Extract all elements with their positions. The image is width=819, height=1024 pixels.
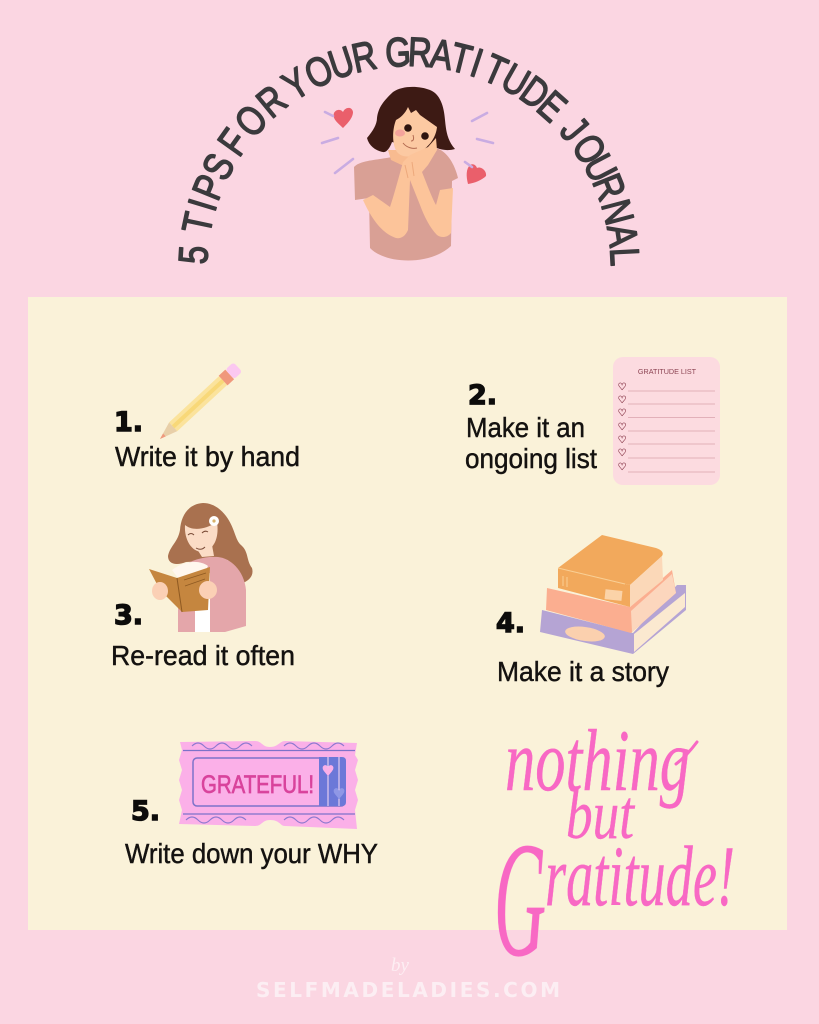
tip 3 number: 3. <box>114 600 143 631</box>
title: T <box>446 33 477 83</box>
icon: grateful ticket: ♥ <box>332 785 346 803</box>
hand lettering: nothing but gratitude: G <box>494 808 546 991</box>
shirt <box>195 573 210 632</box>
footer: website: SELFMADELADIES.COM <box>256 978 560 1002</box>
hearts <box>334 108 353 128</box>
tip 4 number: 4. <box>496 608 525 639</box>
title: A <box>427 30 456 79</box>
tip 3 <box>111 503 295 671</box>
tip 2 number: 2. <box>468 380 497 411</box>
title: P <box>183 168 234 206</box>
icon: gratitude list card <box>613 357 720 485</box>
blush <box>395 130 405 136</box>
title: R <box>407 28 433 76</box>
title: I <box>179 194 226 216</box>
sparkle dashes <box>322 112 493 173</box>
tip 2 label: Make it an <box>466 412 585 443</box>
hair <box>367 87 455 152</box>
neck <box>388 150 420 168</box>
arms and hands <box>363 138 453 238</box>
title: A <box>598 221 647 250</box>
icon: pencil <box>156 362 242 444</box>
icon: gratitude list card: ♡ <box>618 422 627 433</box>
tip 5 <box>125 741 378 869</box>
icon: gratitude list card: ♡ <box>618 408 627 419</box>
illustration: girl reading <box>149 503 253 632</box>
icon: gratitude list card: ♡ <box>618 462 627 473</box>
icon: grateful ticket: GRATEFUL! <box>201 771 314 799</box>
title: R <box>584 167 636 207</box>
title: R <box>348 31 380 82</box>
illustration: girl with hands by cheek <box>322 87 493 260</box>
face <box>393 107 437 156</box>
tip 5 number: 5. <box>131 796 160 827</box>
tip 2: ongoing list <box>465 443 597 474</box>
icon: gratitude list card: ♡ <box>618 382 627 393</box>
icon: gratitude list card: GRATITUDE LIST <box>638 367 697 376</box>
tip 1 <box>114 362 300 472</box>
title: E <box>529 81 576 131</box>
tip 2 <box>465 357 720 485</box>
tip 3 label: Re-read it often <box>111 640 295 671</box>
title: T <box>173 208 222 238</box>
title: I <box>465 39 489 86</box>
title: R <box>247 76 295 126</box>
icon: grateful ticket: ♥ <box>321 762 335 780</box>
hand lettering: nothing but gratitude: but <box>566 777 635 854</box>
icon: gratitude list card: ♡ <box>618 435 627 446</box>
hand lettering: nothing but gratitude: nothing <box>505 713 690 810</box>
hand lettering: nothing but gratitude <box>494 713 735 991</box>
title: O <box>225 95 276 146</box>
icon: gratitude list card: ♡ <box>618 448 627 459</box>
hair <box>168 503 253 583</box>
title: U <box>494 54 538 106</box>
title: G <box>384 28 412 76</box>
icon: stack of books <box>540 535 686 654</box>
book <box>172 562 208 578</box>
title: F <box>208 120 258 164</box>
icon: gratitude list card: ♡ <box>618 395 627 406</box>
title: 5 <box>169 244 217 265</box>
title: S <box>192 146 244 187</box>
title: D <box>512 67 558 118</box>
tip 5 label: Write down your WHY <box>125 838 378 869</box>
cardigan <box>178 557 246 632</box>
title: Y <box>274 58 317 109</box>
title: N <box>593 195 643 229</box>
icon: grateful ticket <box>179 741 358 829</box>
title: J <box>551 107 598 150</box>
title: L <box>601 246 649 267</box>
tip 4 <box>496 535 686 687</box>
tip 1 label: Write it by hand <box>115 441 300 472</box>
title <box>169 28 649 267</box>
title: T <box>477 44 514 95</box>
title: O <box>563 125 616 172</box>
face <box>185 522 218 552</box>
eyes <box>404 124 412 132</box>
shirt <box>354 148 458 260</box>
tip 4 label: Make it a story <box>497 656 669 687</box>
panel: tips <box>28 297 787 930</box>
title: U <box>323 37 360 88</box>
tip 1 number: 1. <box>114 407 143 438</box>
title: O <box>297 45 340 98</box>
title: U <box>575 147 627 189</box>
footer: by line: by <box>391 955 410 976</box>
